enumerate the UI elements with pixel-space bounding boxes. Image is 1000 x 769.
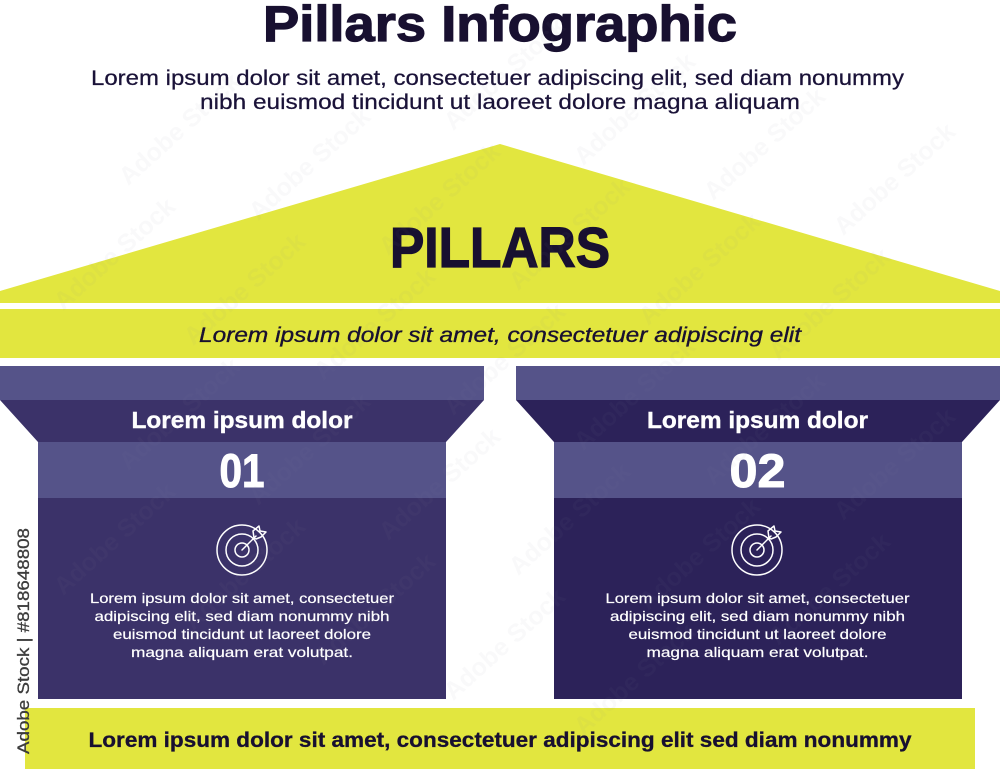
watermark pattern: Adobe Stock <box>49 477 181 601</box>
subtitle text <box>91 67 905 114</box>
watermark pattern: Adobe Stock <box>829 117 961 241</box>
watermark pattern: Adobe Stock <box>114 352 246 476</box>
pillar 01 <box>0 366 484 699</box>
pillar 02 <box>516 366 1000 699</box>
pillar 02 body text <box>606 590 910 660</box>
subtitle text: nibh euismod tincidunt ut laoreet dolore magna aliquam <box>200 91 800 114</box>
watermark pattern: Adobe Stock <box>439 12 571 136</box>
icon: target with arrow <box>732 525 782 575</box>
pillar 02 number: 02 <box>730 444 786 497</box>
icon: target with arrow <box>217 525 267 575</box>
watermark pattern: Adobe Stock <box>504 172 636 296</box>
watermark pattern: Adobe Stock <box>49 192 181 316</box>
pillar 01 body text: adipiscing elit, sed diam nonummy nibh <box>94 608 390 624</box>
stock id label: Adobe Stock | #818648808 <box>14 528 33 754</box>
watermark pattern: Adobe Stock <box>374 137 506 261</box>
pillar 02 body text: euismod tincidunt ut laoreet dolore <box>628 626 887 642</box>
watermark pattern: Adobe Stock <box>374 422 506 546</box>
watermark pattern: Adobe Stock <box>309 547 441 671</box>
pillar 02 body text: magna aliquam erat volutpat. <box>646 644 868 660</box>
frieze banner <box>0 309 1000 358</box>
pillar 01 body text: magna aliquam erat volutpat. <box>131 644 353 660</box>
watermark pattern: Adobe Stock <box>179 512 311 636</box>
watermark pattern: Adobe Stock <box>699 82 831 206</box>
watermark pattern: Adobe Stock <box>699 367 831 491</box>
watermark pattern: Adobe Stock <box>569 617 701 741</box>
pillar 01 body text: Lorem ipsum dolor sit amet, consectetuer <box>90 590 394 606</box>
watermark pattern: Adobe Stock <box>504 457 636 581</box>
watermark pattern: Adobe Stock <box>569 47 701 171</box>
pillar 01 body text <box>90 590 394 660</box>
base bar <box>25 708 975 769</box>
pillar 02 body text: Lorem ipsum dolor sit amet, consectetuer <box>606 590 910 606</box>
subtitle text: Lorem ipsum dolor sit amet, consectetuer adipiscing elit, sed diam nonummy <box>91 67 905 90</box>
watermark pattern: Adobe Stock <box>634 492 766 616</box>
roof <box>0 144 1000 303</box>
roof label: PILLARS <box>390 216 610 280</box>
watermark pattern: Adobe Stock <box>634 207 766 331</box>
pillar 01 heading: Lorem ipsum dolor <box>132 407 353 433</box>
watermark pattern: Adobe Stock <box>114 67 246 191</box>
base bar text: Lorem ipsum dolor sit amet, consectetuer adipiscing elit sed diam nonummy <box>88 729 912 752</box>
watermark pattern: Adobe Stock <box>439 297 571 421</box>
watermark pattern: Adobe Stock <box>179 227 311 351</box>
pillar 01 body text: euismod tincidunt ut laoreet dolore <box>113 626 371 642</box>
watermark pattern: Adobe Stock <box>439 582 571 706</box>
watermark pattern: Adobe Stock <box>309 262 441 386</box>
watermark pattern: Adobe Stock <box>764 527 896 651</box>
watermark pattern: Adobe Stock <box>764 242 896 366</box>
pillar 02 body text: adipiscing elit, sed diam nonummy nibh <box>610 608 905 624</box>
pillar 01 number: 01 <box>220 444 264 497</box>
watermark pattern: Adobe Stock <box>829 402 961 526</box>
pillar 02 heading: Lorem ipsum dolor <box>647 407 868 433</box>
watermark pattern: Adobe Stock <box>244 102 376 226</box>
frieze text: Lorem ipsum dolor sit amet, consectetuer adipiscing elit <box>199 324 802 347</box>
watermark pattern: Adobe Stock <box>244 387 376 511</box>
watermark pattern: Adobe Stock <box>569 332 701 456</box>
